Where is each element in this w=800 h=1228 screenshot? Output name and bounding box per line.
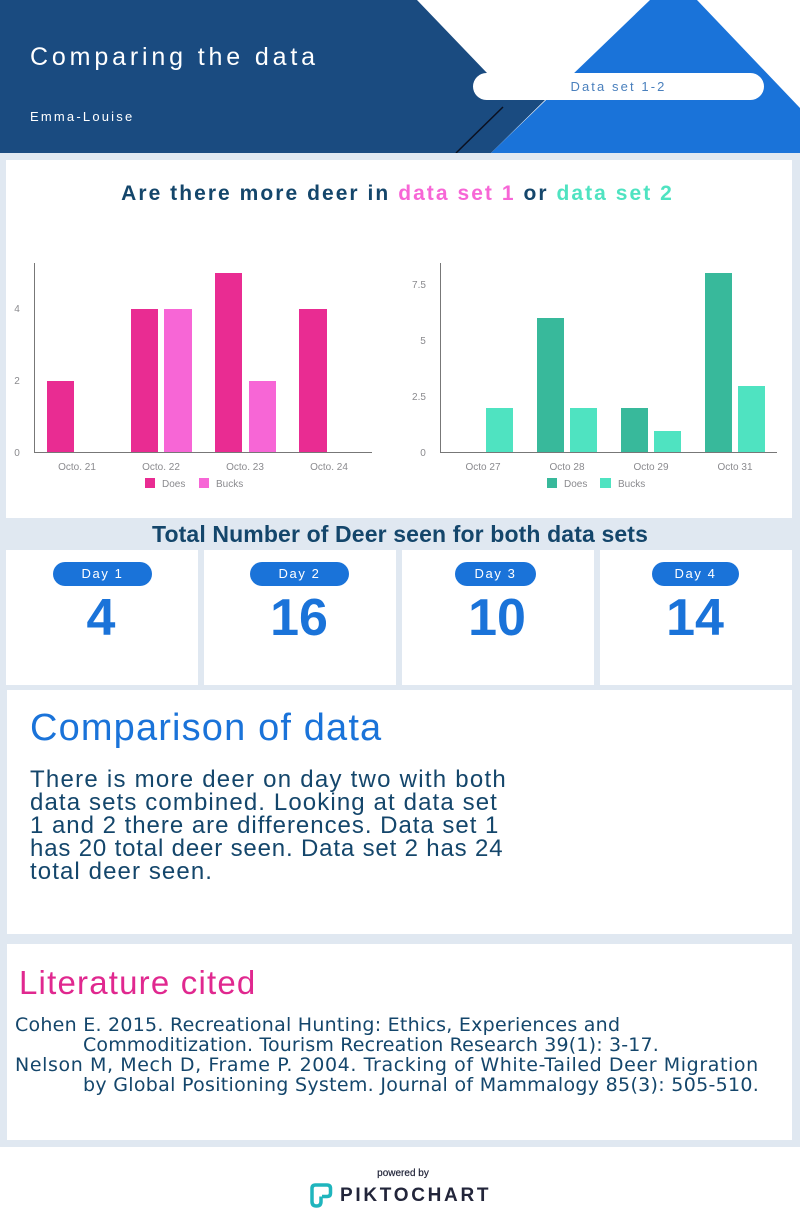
card: day 3: Day 3: [475, 566, 516, 581]
data set label pill: Data set 1-2: [570, 79, 666, 94]
bar chart: data set 2: Octo 27: [465, 462, 501, 473]
bar chart: data set 2: Does: [564, 479, 587, 490]
bar chart: data set 2: 7.5: [412, 280, 426, 291]
bar chart: data set 2: Octo 31: [717, 462, 753, 473]
comparison heading: Comparison of data: [30, 707, 382, 749]
citations: Commoditization. Tourism Recreation Research 39(1): 3-17.: [83, 1034, 659, 1056]
icon: piktochart logo: [310, 1183, 332, 1208]
header banner: [0, 0, 800, 153]
piktochart wordmark: PIKTOCHART: [340, 1185, 491, 1206]
comparison text: total deer seen.: [30, 858, 213, 885]
card: day 2: [204, 550, 396, 685]
bar chart: data set 1: 0: [14, 448, 20, 459]
bar chart: data set 1: Octo. 24: [310, 462, 348, 473]
bar chart: data set 1: Octo. 23: [226, 462, 264, 473]
panel: bar charts: [6, 160, 792, 518]
chart heading: Are there more deer in data set 1 or data set 2: [121, 182, 674, 205]
bar chart: data set 1: [14, 263, 372, 490]
citations: Cohen E. 2015. Recreational Hunting: Ethics, Experiences and: [15, 1014, 620, 1036]
card: day 4: 14: [666, 589, 724, 647]
card: day 1: 4: [87, 589, 115, 647]
bar chart: data set 1: Bucks: [216, 479, 243, 490]
panel: comparison of data: [7, 690, 792, 934]
card: day 3: [402, 550, 594, 685]
bar chart: data set 2: Octo 28: [549, 462, 585, 473]
citations: Nelson M, Mech D, Frame P. 2004. Tracking of White-Tailed Deer Migration: [15, 1054, 759, 1076]
card: day 1: Day 1: [82, 566, 123, 581]
footer: powered by piktochart: [310, 1168, 491, 1208]
bar chart: data set 1: Does: [162, 479, 185, 490]
bar chart: data set 1: 4: [14, 304, 20, 315]
bar chart: data set 1: 2: [14, 376, 20, 387]
bar chart: data set 2: 0: [420, 448, 426, 459]
card: day 2: Day 2: [279, 566, 320, 581]
powered by text: powered by: [377, 1168, 429, 1179]
literature heading: Literature cited: [19, 964, 256, 1001]
bar chart: data set 2: 5: [420, 336, 426, 347]
card: day 3: 10: [468, 589, 526, 647]
comparison text: 1 and 2 there are differences. Data set 1: [30, 812, 499, 839]
citations: by Global Positioning System. Journal of Mammalogy 85(3): 505-510.: [83, 1074, 759, 1096]
author: Emma-Louise: [30, 109, 134, 124]
bar chart: data set 2: 2.5: [412, 392, 426, 403]
bar chart: data set 1: Octo. 21: [58, 462, 96, 473]
bar chart: data set 2: Bucks: [618, 479, 645, 490]
bar chart: data set 2: [412, 263, 777, 490]
card: day 1: [6, 550, 198, 685]
card: day 4: Day 4: [675, 566, 716, 581]
panel: literature cited: [7, 944, 792, 1140]
comparison text: data sets combined. Looking at data set: [30, 789, 498, 816]
comparison text: has 20 total deer seen. Data set 2 has 24: [30, 835, 503, 862]
bar chart: data set 1: Octo. 22: [142, 462, 180, 473]
card: day 4: [600, 550, 792, 685]
data set label pill: [473, 73, 764, 100]
comparison text: There is more deer on day two with both: [30, 766, 507, 793]
section heading: totals: Total Number of Deer seen for both data sets: [152, 521, 648, 547]
bar chart: data set 2: Octo 29: [633, 462, 669, 473]
comparison text: [30, 766, 507, 885]
citations: [15, 1014, 759, 1096]
title: Comparing the data: [30, 43, 319, 71]
card: day 2: 16: [270, 589, 328, 647]
